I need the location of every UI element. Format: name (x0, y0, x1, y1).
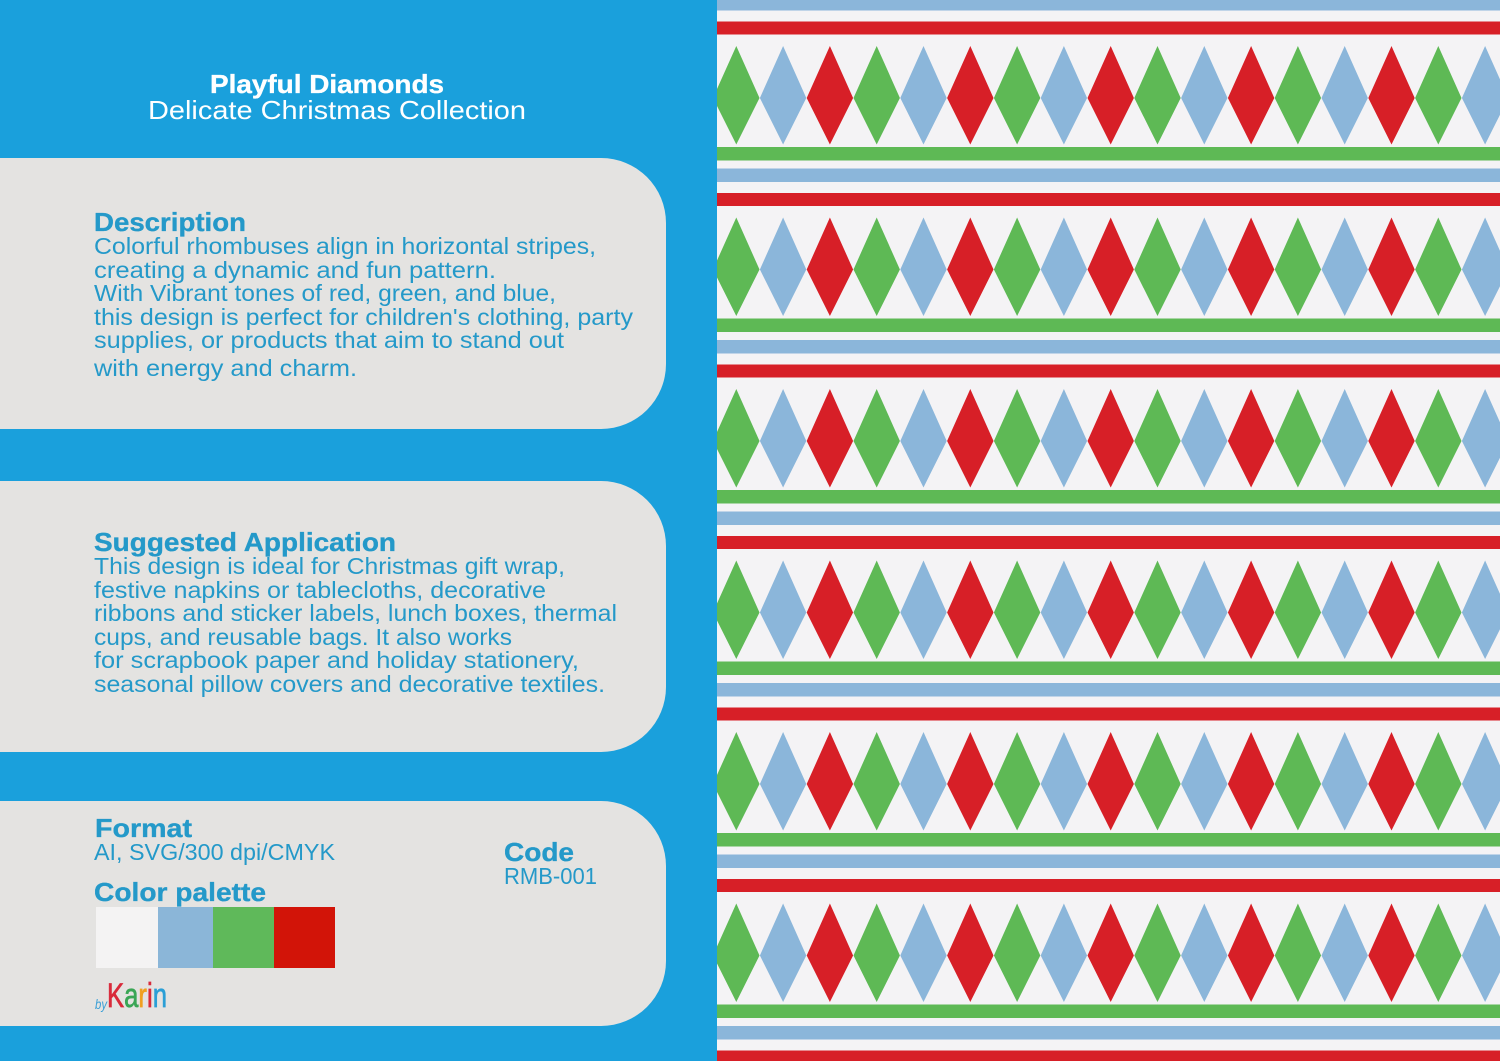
title: Playful Diamonds (210, 69, 444, 99)
text block: description body (93, 233, 633, 381)
text block: description body: this design is perfect for children's clothing, party (94, 304, 633, 330)
heading: color palette: Color palette (94, 877, 266, 907)
heading: suggested application: Suggested Application (94, 527, 396, 557)
panel: description (0, 158, 666, 429)
panel: suggested application (0, 481, 666, 752)
text block: application body: seasonal pillow covers and decorative textiles. (94, 671, 605, 697)
text: format value: AI, SVG/300 dpi/CMYK (94, 839, 335, 865)
title: Delicate Christmas Collection (148, 95, 526, 125)
panel: format, palette, code (0, 801, 666, 1026)
text block: application body: for scrapbook paper and holiday stationery, (94, 647, 579, 673)
pattern: Christmas diamond stripes (717, 0, 1500, 1061)
text block: description body: With Vibrant tones of red, green, and blue, (94, 280, 556, 306)
heading: code: Code (504, 837, 574, 867)
logo: by Karin: by (95, 996, 108, 1012)
text block: application body: festive napkins or tablecloths, decorative (94, 577, 546, 603)
text block: description body: supplies, or products that aim to stand out (94, 327, 564, 353)
text block: description body: Colorful rhombuses align in horizontal stripes, (94, 233, 596, 259)
text block: application body: ribbons and sticker labels, lunch boxes, thermal (94, 600, 617, 626)
heading: description: Description (94, 207, 246, 237)
title (148, 69, 526, 125)
background: blue left column (0, 0, 717, 1061)
text block: application body: cups, and reusable bags. It also works (94, 624, 512, 650)
text block: application body (94, 553, 617, 697)
heading: format: Format (95, 813, 192, 843)
text block: description body: creating a dynamic and fun pattern. (94, 257, 496, 283)
logo: by Karin: Karin (107, 977, 167, 1015)
text: code value: RMB-001 (504, 863, 597, 889)
text block: description body: with energy and charm. (93, 355, 357, 381)
color palette swatches (96, 907, 335, 968)
text block: application body: This design is ideal for Christmas gift wrap, (94, 553, 565, 579)
